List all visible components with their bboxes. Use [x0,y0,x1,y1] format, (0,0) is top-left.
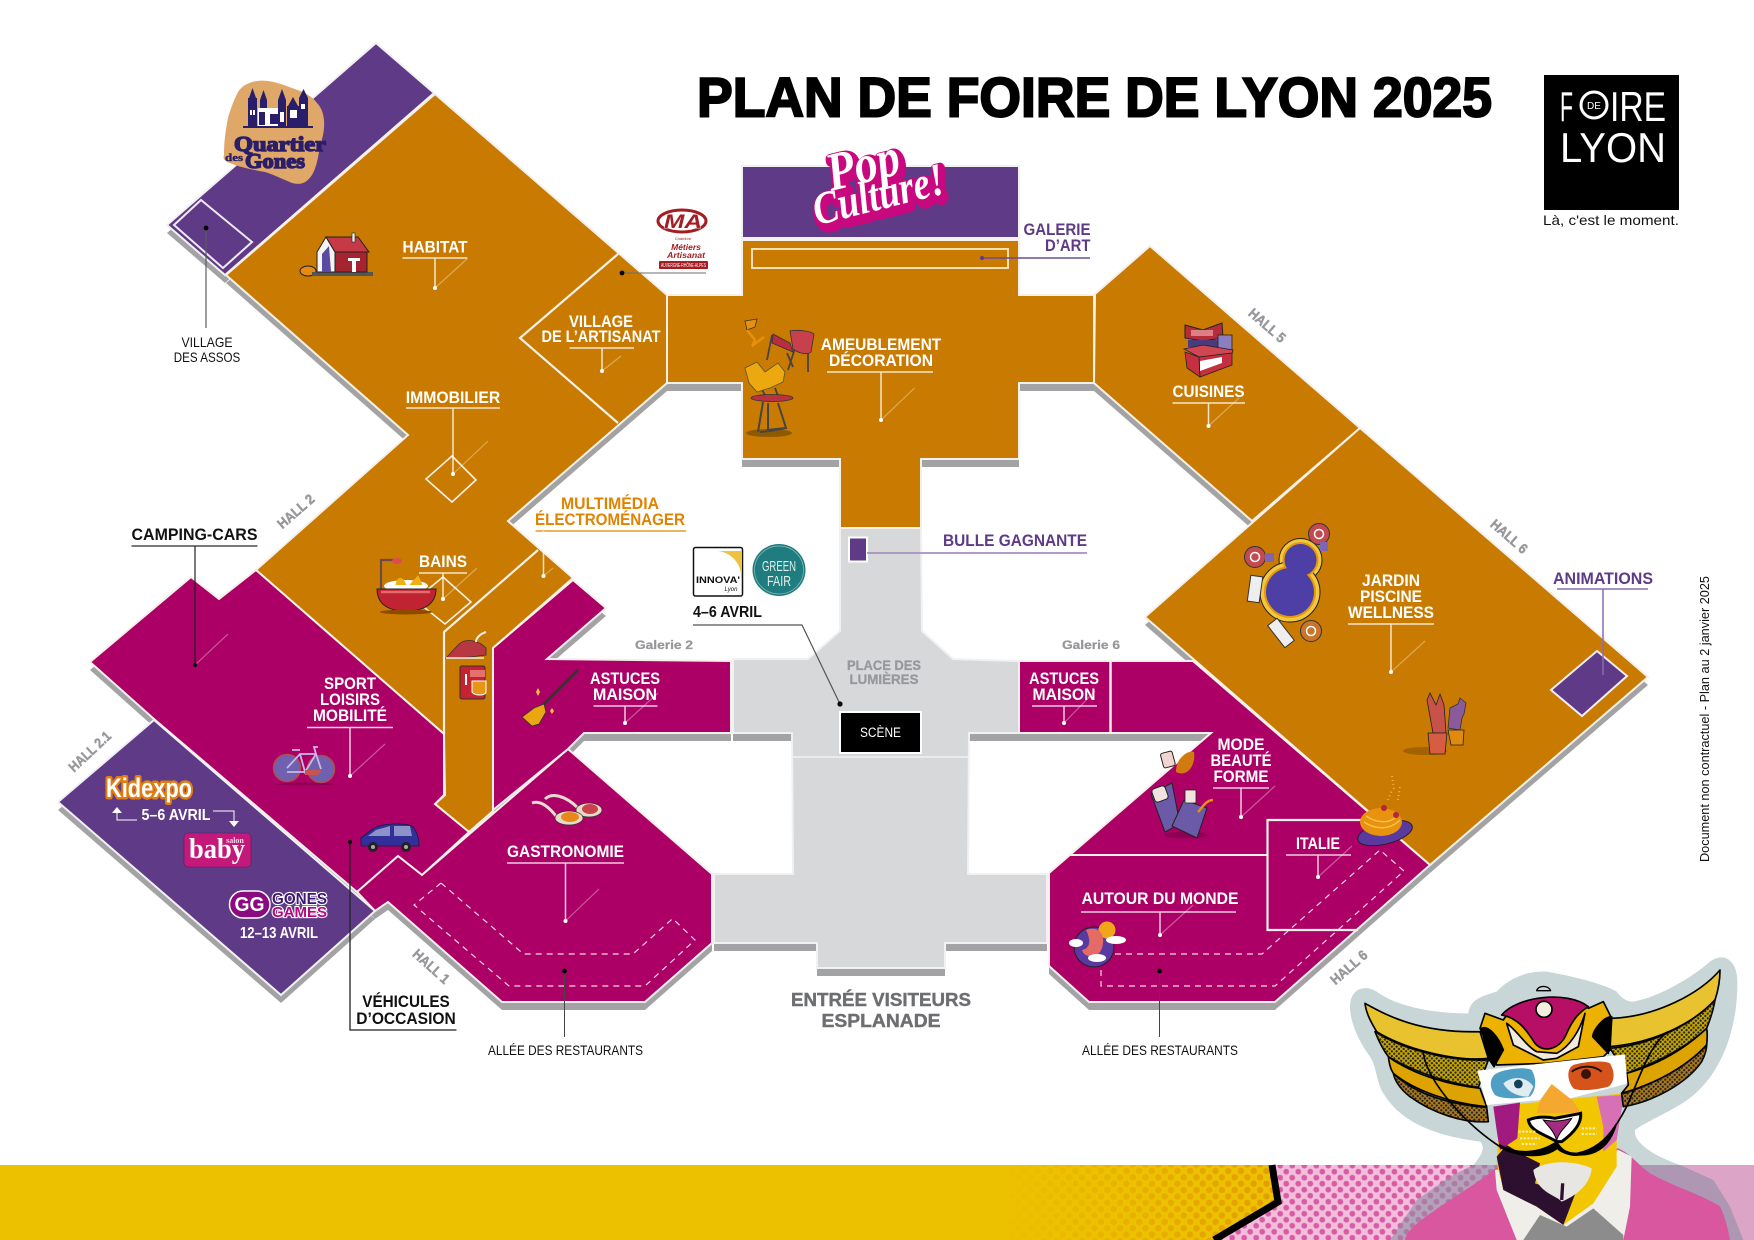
icon: house [300,233,373,276]
logo: quartier des gones: Gones [245,149,305,173]
logo: gones games: GONES [272,891,327,908]
logo: cma [658,210,708,269]
icon: broom [522,670,578,726]
label: jardin piscine wellness: PISCINE [1360,588,1422,606]
logo: salon baby: salon [226,836,244,845]
label: village des assos: VILLAGE [182,334,232,350]
panel: hall 6 magenta [1019,661,1430,1002]
character wing right [1609,970,1720,1107]
logo: green fair [752,544,806,596]
logo: cma: Métiers [671,242,701,252]
label: allee des restaurants west: ALLÉE DES RESTAURANTS [488,1042,643,1058]
label: gastronomie: GASTRONOMIE [507,843,624,861]
logo: innova lyon: INNOVA' [696,575,740,586]
hall names: HALL 6 [1327,947,1371,988]
label: mode beaute forme: MODE [1218,736,1264,754]
panel: halls orange west [226,94,667,832]
hall names: HALL 2 [274,491,318,532]
label: mode beaute forme: FORME [1214,768,1268,786]
icon: car [361,824,419,852]
bottom band: pop art halftone [0,1165,1754,1240]
logo: pop culture: Culture! [807,153,949,235]
label: ameublement decoration: DÉCORATION [829,351,933,370]
character helmet [1480,986,1612,1067]
icon: plants [1403,693,1466,755]
logo: foire de lyon: DE [1587,101,1601,112]
logo: cma: MA [664,212,702,233]
icon: iron [446,632,486,658]
logo: pop culture: Pop [822,130,909,207]
label: place des lumieres [847,657,921,687]
label: cuisines [1172,383,1245,428]
panel: gastronomie [357,749,712,1002]
hall names: HALL 1 [410,946,453,987]
logo: salon baby: baby [189,834,245,865]
logo: cma: Chambre [675,236,692,241]
pointer: cma [620,271,706,275]
label: astuces maison west [590,670,660,725]
icon: globe [1069,922,1126,967]
label: 5-6 avril with arrows [112,807,239,827]
label: galerie 2: Galerie 2 [635,638,693,652]
panel: hall 6 garden [1145,428,1648,865]
logo: innova lyon [694,548,742,596]
logo: foire de lyon [1544,75,1679,210]
label: 12-13 avril: 12–13 AVRIL [240,925,318,942]
label: galerie d'art [980,221,1090,260]
label: allee des restaurants east [1082,969,1238,1058]
label: sport loisirs mobilite [307,675,393,778]
character moustache and nose [1500,1113,1617,1156]
label: bains: BAINS [419,553,467,571]
label: astuces maison east [1029,670,1099,725]
logo: quartier des gones: Quartier [234,132,326,156]
label: galerie d'art: GALERIE [1024,221,1090,239]
label: village des assos [174,226,240,365]
label: galerie d'art: D’ART [1045,237,1090,255]
label: camping-cars: CAMPING-CARS [132,526,258,544]
character light halo [1350,957,1737,1165]
label: gastronomie [507,843,624,923]
label: astuces maison west: MAISON [593,686,657,704]
bulle gagnante marker: BULLE GAGNANTE [943,532,1087,550]
label: italie [1286,835,1352,879]
label: autour du monde [1081,890,1238,937]
label: jardin piscine wellness: JARDIN [1362,572,1420,590]
label: mode beaute forme [1210,736,1275,819]
panel: hall 5 [1094,246,1360,521]
hall names: HALL 5 [1245,305,1289,346]
logo: gones games: GAMES [272,904,327,921]
label: entree visiteurs esplanade: ESPLANADE [822,1011,940,1031]
label: 5-6 avril with arrows: 5–6 AVRIL [142,807,210,824]
label: village des assos: DES ASSOS [174,349,240,365]
label: sport loisirs mobilite: LOISIRS [320,691,380,709]
logo: kidexpo: Kidexpo [106,773,192,803]
label: immobilier: IMMOBILIER [406,389,500,407]
label: vehicules d'occasion: VÉHICULES [362,992,450,1011]
character wing left [1365,1003,1488,1122]
label: multimedia electromenager [535,494,686,578]
logo: pop culture [807,126,952,239]
panel: quartier des gones zone [167,43,434,275]
label: multimedia electromenager: ÉLECTROMÉNAGER [535,510,685,529]
label: ameublement decoration [821,336,941,422]
character neck and face [1493,1083,1624,1225]
label: habitat: HABITAT [402,238,468,256]
label: sport loisirs mobilite: SPORT [324,675,376,693]
hall names: HALL 6 [1487,516,1531,557]
floor plan shadows [58,51,1648,1010]
label: astuces maison east: MAISON [1032,686,1096,704]
logo: green fair: GREEN [762,558,796,575]
logo: cma: Artisanat [666,250,706,260]
label: cuisines: CUISINES [1172,383,1244,401]
label: astuces maison east: ASTUCES [1029,670,1099,688]
label: 4-6 avril with pointer to scene: 4–6 AVRIL [693,604,762,621]
label: sport loisirs mobilite: MOBILITÉ [313,706,387,725]
icon: bike [274,747,334,786]
character halo on band [1390,1165,1743,1240]
icon: coffee maker [460,666,486,699]
character: lion with winged helmet and 3d glasses [1350,957,1743,1240]
icon: bags [1151,751,1213,838]
icon: pasta plate [1355,776,1415,850]
label: 4-6 avril with pointer to scene [693,604,843,707]
panel: central orange hall [667,240,1094,528]
panel: scene [840,712,921,753]
logo: gones games [230,891,327,921]
label: immobilier [406,389,500,476]
logo: pop culture: Pop [819,126,906,203]
logo: foire de lyon: LYON [1560,124,1666,171]
logo: quartier des gones [223,81,326,184]
label: italie: ITALIE [1296,835,1340,853]
title: PLAN DE FOIRE DE LYON 2025 [697,66,1492,128]
label: vehicules d'occasion: D’OCCASION [356,1010,456,1028]
icon: kitchen [1184,323,1233,377]
hall names [65,305,1531,988]
label: village de l'artisanat [542,313,660,373]
label: mode beaute forme: BEAUTÉ [1210,751,1272,770]
label: animations: ANIMATIONS [1553,570,1653,588]
icon: pool [1244,524,1330,648]
panel: hall 2 magenta sport [90,570,469,892]
label: place des lumieres: PLACE DES [847,657,921,673]
label: village de l'artisanat: DE L’ARTISANAT [542,328,660,346]
logo: cma: AUVERGNE-RHÔNE-ALPES [661,262,706,269]
panel: astuces maison west [493,580,731,810]
character 3d glasses [1477,1054,1627,1105]
character chin straps [1423,1032,1668,1154]
logo: quartier des gones: des [225,153,243,164]
label: jardin piscine wellness: WELLNESS [1348,604,1434,622]
hall names: HALL 2.1 [65,728,114,775]
label: ameublement decoration: AMEUBLEMENT [821,336,941,354]
label: habitat [402,238,468,290]
label: entree visiteurs esplanade [791,989,971,1031]
logo: green fair: FAIR [767,573,791,590]
label: place des lumieres: LUMIÈRES [850,671,918,687]
logo: pop culture: Culture! [810,157,952,239]
logo: foire de lyon: F [1560,83,1573,130]
bulle gagnante marker [849,532,1087,562]
panel: scene: SCÈNE [860,725,901,740]
label: jardin piscine wellness [1348,572,1434,674]
label: vehicules d'occasion [348,840,456,1030]
label: entree visiteurs esplanade: ENTRÉE VISITEURS [791,989,971,1010]
label: multimedia electromenager: MULTIMÉDIA [561,494,659,513]
logo: gones games: GG [234,894,264,916]
icon: bathtub [377,558,436,614]
label: village de l'artisanat: VILLAGE [569,313,633,331]
label: autour du monde: AUTOUR DU MONDE [1082,890,1238,908]
panel: hall 2.1 purple [58,720,375,995]
note: document non contractuel: Document non contractuel - Plan au 2 janvier 2025 [1697,576,1712,862]
panel: central pop culture purple block [742,166,1019,238]
character beard [1533,1162,1592,1202]
walkway: grey esplanade and galleries [714,528,1047,968]
label: allee des restaurants west [488,969,643,1058]
label: bains [419,553,477,601]
character shirt [1495,1150,1632,1240]
logo: innova lyon: Lyon [725,587,738,593]
slogan: Là, c'est le moment. [1543,212,1679,228]
icon: spoons [532,796,602,825]
label: galerie 6: Galerie 6 [1062,638,1120,652]
label: allee des restaurants east: ALLÉE DES RESTAURANTS [1082,1042,1238,1058]
label: animations [1553,570,1653,675]
character jacket [1405,1148,1730,1240]
label: astuces maison west: ASTUCES [590,670,660,688]
icon: furniture [745,319,814,437]
label: camping-cars [132,526,258,667]
logo: foire de lyon: IRE [1610,83,1666,130]
